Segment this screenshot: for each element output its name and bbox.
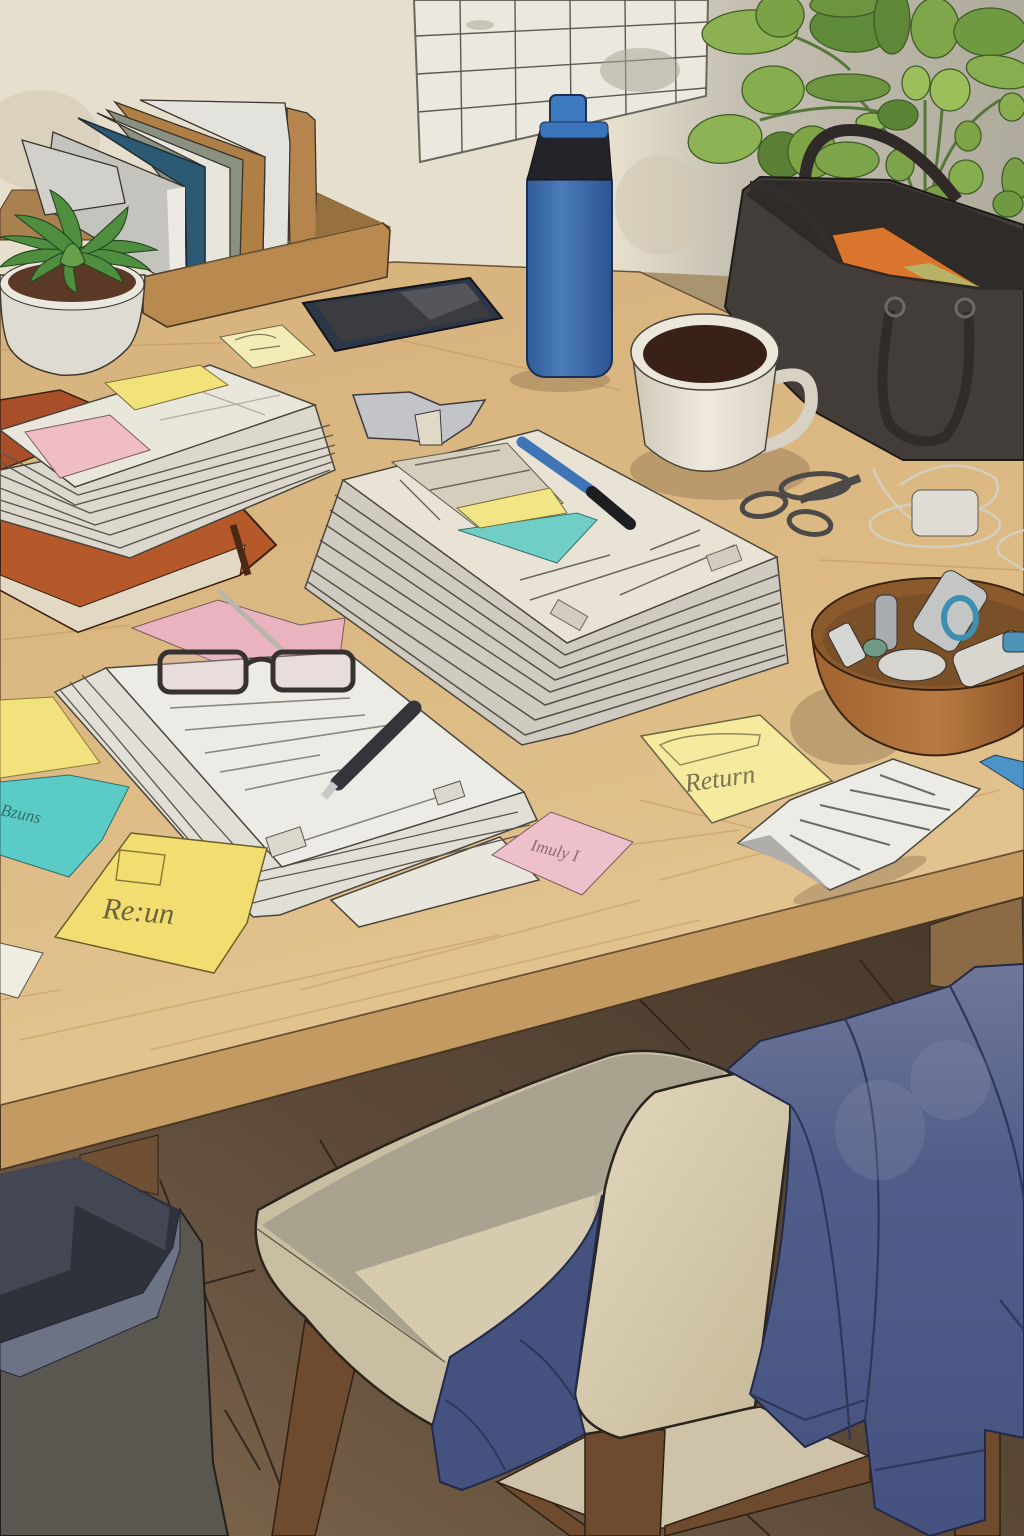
large yellow sticky note [55,833,267,973]
blue binder [78,118,205,273]
wall [0,0,1024,320]
floor under desk [0,880,1024,1536]
sticky notes on center stack [457,488,597,563]
back desk leg left [80,1135,158,1195]
blue clip right edge [980,755,1024,790]
chair underside and legs [272,1320,1000,1536]
floorboards [160,960,900,1536]
dip pen on pink note [218,590,282,650]
wood grain [0,340,1020,1050]
sage folder [107,110,243,263]
shadowed wall base behind desk [640,272,1024,500]
large yellow sticky note: Re:un [100,892,176,931]
wall stains [0,90,705,255]
trash bin with liner [0,1157,228,1536]
pink sticky note: Imuly I [528,835,582,866]
pink note under glasses [132,600,345,662]
chair back cushion [575,1072,792,1438]
yellow return sticky note: Return [682,759,757,798]
brown notebook stack left [0,390,276,632]
brown back folder [287,108,317,248]
grey book [43,132,185,277]
black pen [324,708,414,797]
chair seat [256,1051,790,1435]
teal sticky note [0,775,129,877]
pink sticky note [492,812,633,895]
water bottle [527,95,612,377]
pen on center stack [522,442,630,524]
white pages [97,113,230,268]
teal sticky note: Bzuns [0,800,43,827]
table shadows under objects [510,368,930,913]
left paper stack [0,365,335,558]
tray back rim [0,190,390,240]
tray front [143,223,390,327]
smartphone [303,278,502,351]
wooden bowl with supplies [812,567,1024,755]
front grey folder [22,140,125,215]
yellow return sticky note [641,715,832,823]
folded metal clip [353,392,485,445]
denim jacket sleeve left [432,1195,602,1490]
center paper stack [305,430,788,745]
scissors and clips [740,471,860,537]
small torn paper bottom left [0,943,43,998]
desk front face [0,850,1024,1170]
front paper stack [55,652,539,927]
crumpled receipt [738,759,980,890]
coffee mug [631,314,811,471]
desk top [0,262,1024,1105]
wall calendar [414,0,708,162]
yellow sticky note left top [0,697,100,778]
tangled cable with white tag [870,466,1024,570]
plant: large leaves top right [685,0,1024,217]
small yellow sticky note [220,325,315,368]
succulent in white pot [0,190,157,375]
sticky notes on left stack [25,365,228,478]
file organizer tray with folders [0,100,390,327]
denim jacket draped [727,964,1024,1536]
tote bag [725,130,1024,460]
back desk leg right [930,895,1024,1000]
brown folder [115,102,265,260]
large white sheets [140,100,290,255]
eyeglasses [160,652,353,692]
